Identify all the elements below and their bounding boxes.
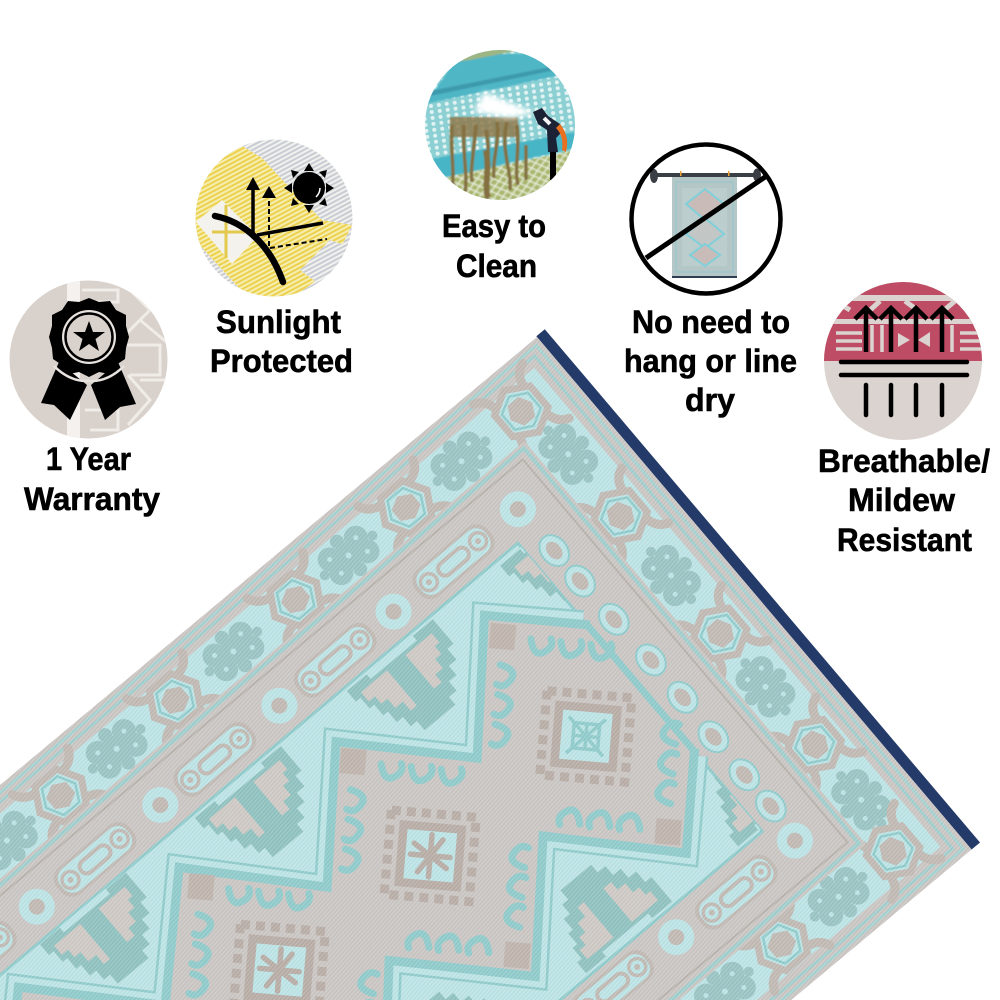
outer motif band (0, 358, 948, 1000)
icon: breathable layers (820, 280, 990, 440)
corner squares (176, 611, 694, 1000)
central medallions (40, 637, 671, 1000)
woven pattern (67, 281, 166, 438)
hose nozzle (533, 108, 567, 180)
label: Sunlight Protected (210, 304, 353, 379)
navy binding edge (536, 329, 980, 850)
layer lines (841, 362, 967, 415)
teal squiggle chains (152, 599, 717, 1000)
zigzag medallion chain (0, 549, 759, 1000)
heat arrows (215, 177, 327, 282)
weave texture (0, 337, 972, 1000)
water spray (474, 92, 536, 118)
badge (41, 298, 136, 420)
curtain rod (650, 168, 761, 183)
label: 1 Year Warranty (24, 441, 160, 517)
label: Breathable / Mildew Resistant: Breathable/ (818, 443, 990, 479)
prohibition sign (632, 144, 780, 294)
upward arrows (855, 308, 953, 352)
label: Breathable / Mildew Resistant: Resistant (837, 522, 972, 558)
icon: sunlight protection (195, 140, 360, 300)
label: Easy to Clean: Clean (456, 248, 537, 284)
sun (284, 163, 334, 213)
label: Easy to Clean: Easy to (442, 208, 546, 244)
label: Breathable / Mildew Resistant (818, 443, 990, 558)
label: No need to hang or line dry: No need to (632, 304, 790, 340)
rug photo (425, 48, 575, 205)
hung rug (672, 176, 737, 278)
label: 1 Year Warranty: Warranty (24, 481, 160, 517)
inner taupe ring band (0, 441, 866, 1000)
red woven pattern (820, 280, 990, 361)
arch motifs (40, 547, 760, 1000)
central field (0, 541, 764, 1000)
label: Sunlight Protected: Protected (210, 343, 353, 379)
label: Sunlight Protected: Sunlight (216, 304, 341, 340)
icon: hose cleaning (425, 48, 575, 205)
yellow woven pattern (196, 146, 352, 296)
icon: no hanging (632, 144, 780, 294)
label: No need to hang or line dry: dry (685, 382, 735, 418)
label: No need to hang or line dry: hang or line (624, 343, 797, 379)
outer border (0, 337, 972, 1000)
label: 1 Year Warranty: 1 Year (46, 441, 131, 477)
label: No need to hang or line dry (624, 304, 797, 418)
label: Easy to Clean (442, 208, 546, 284)
rug (0, 329, 980, 1000)
icon: warranty ribbon (10, 275, 170, 445)
label: Breathable / Mildew Resistant: Mildew (848, 482, 955, 518)
